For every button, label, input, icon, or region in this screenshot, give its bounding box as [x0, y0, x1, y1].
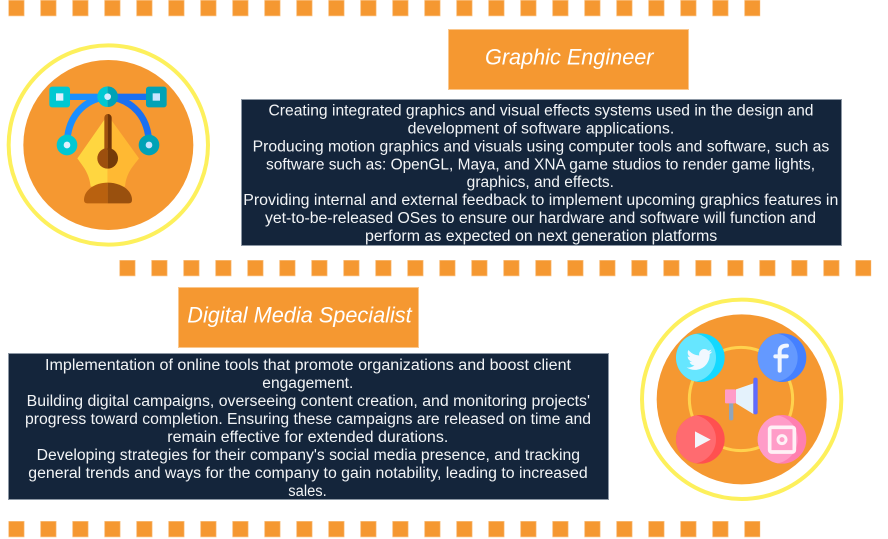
panel: Digital Media Specialist description: Building digital campaigns, overseeing content creation, and monitoring projects'	[27, 393, 590, 410]
panel: Digital Media Specialist description: engagement.	[262, 375, 353, 392]
heading: Digital Media Specialist: Digital Media Specialist	[187, 303, 413, 328]
panel: Digital Media Specialist description: sales.	[288, 483, 327, 500]
panel: Graphic Engineer description: Providing internal and external feedback to implement upcoming graphics features in	[243, 192, 838, 209]
icon: pen tool badge	[9, 45, 208, 245]
heading: Graphic Engineer	[448, 30, 688, 90]
middle dotted border	[119, 260, 871, 276]
panel: Digital Media Specialist description	[8, 354, 608, 500]
panel: Graphic Engineer description: Producing motion graphics and visuals using computer tools and software, such as	[253, 138, 830, 155]
panel: Digital Media Specialist description: remain effective for extended durations.	[167, 429, 448, 446]
panel: Graphic Engineer description: development of software applications.	[408, 120, 674, 137]
icon: facebook	[758, 333, 806, 382]
icon: twitter	[676, 333, 725, 382]
icon: youtube	[676, 415, 725, 464]
panel: Graphic Engineer description: perform as expected on next generation platforms	[365, 228, 718, 245]
icon: instagram	[758, 415, 806, 464]
icon: megaphone	[725, 378, 758, 420]
top dotted border	[8, 0, 760, 16]
panel: Digital Media Specialist description: Developing strategies for their company's social media presence, and tracking	[37, 447, 580, 464]
panel: Graphic Engineer description: Creating integrated graphics and visual effects systems used in the design and	[268, 102, 814, 120]
panel: Digital Media Specialist description: general trends and ways for the company to gain notability, leading to increased	[28, 465, 588, 482]
panel: Graphic Engineer description: graphics, and effects.	[467, 174, 614, 191]
heading: Digital Media Specialist	[178, 288, 418, 348]
panel: Graphic Engineer description: yet-to-be-released OSes to ensure our hardware and software will function and	[265, 210, 816, 227]
panel: Digital Media Specialist description: Implementation of online tools that promote organizations and boost client	[45, 357, 572, 374]
panel: Digital Media Specialist description: progress toward completion. Ensuring these campaigns are released on time and	[25, 411, 591, 428]
panel: Graphic Engineer description	[242, 100, 842, 246]
icon: social media badge	[642, 300, 841, 499]
heading: Graphic Engineer: Graphic Engineer	[485, 44, 655, 70]
bottom dotted border	[8, 521, 760, 537]
panel: Graphic Engineer description: software such as: OpenGL, Maya, and XNA game studios to render game lights,	[266, 156, 815, 173]
